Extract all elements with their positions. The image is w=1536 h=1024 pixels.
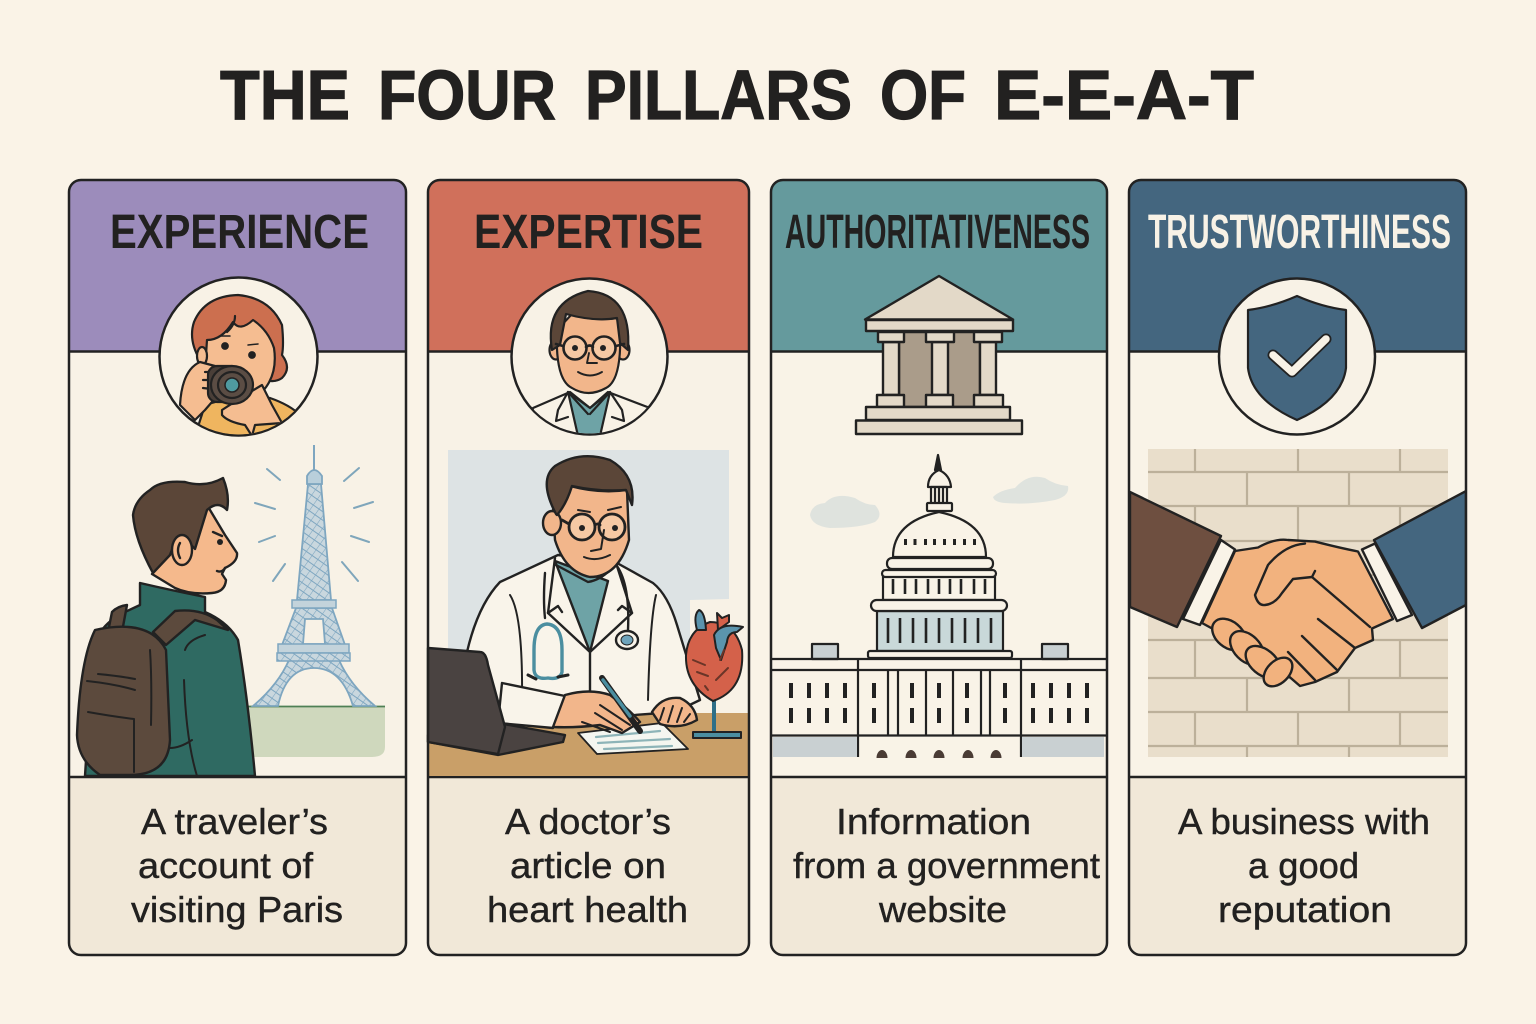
illustration: handshake (1130, 491, 1466, 692)
illustration: backdrop (448, 450, 729, 700)
title: THE (220, 56, 350, 134)
caption: expertise (487, 801, 688, 930)
illustration: traveler with backpack (77, 478, 255, 776)
caption: experience: visiting Paris (131, 889, 343, 930)
title: E-E-A-T (994, 56, 1254, 134)
title (220, 56, 1254, 134)
caption: experience: account of (138, 845, 314, 886)
illustration: capitol building (771, 455, 1107, 758)
writing hands (578, 723, 688, 754)
caption: experience (131, 801, 343, 930)
panel: expertise (428, 180, 749, 955)
icon: photographer (160, 278, 318, 440)
icon: doctor portrait (512, 278, 668, 440)
title: PILLARS (585, 56, 852, 134)
title: FOUR (378, 56, 556, 134)
caption: authoritativeness (793, 801, 1100, 930)
illustration: clouds (810, 477, 1068, 528)
title: OF (880, 56, 966, 134)
caption: trustworthiness: a good (1248, 845, 1359, 886)
illustration: doctor at desk (428, 456, 748, 776)
panel: trustworthiness (1129, 180, 1466, 955)
caption: experience: A traveler’s (141, 801, 328, 842)
caption: trustworthiness: A business with (1178, 801, 1430, 842)
caption: trustworthiness (1178, 801, 1430, 930)
caption: expertise: heart health (487, 889, 688, 930)
icon: classical building (856, 276, 1022, 434)
panel: experience (69, 180, 406, 955)
caption: authoritativeness: from a government (793, 845, 1100, 886)
desk (429, 713, 748, 776)
caption: authoritativeness: website (878, 889, 1007, 930)
illustration: heart model (686, 610, 743, 738)
illustration: brick wall (1148, 449, 1448, 757)
caption: authoritativeness: Information (836, 801, 1031, 842)
caption: trustworthiness: reputation (1218, 889, 1392, 930)
panel: authoritativeness (771, 180, 1107, 955)
laptop (428, 723, 565, 755)
heading: experience: EXPERIENCE (110, 206, 369, 259)
caption: expertise: A doctor’s (505, 801, 671, 842)
caption: expertise: article on (510, 845, 666, 886)
head (553, 486, 629, 577)
icon: shield with check (1219, 278, 1375, 434)
heading: authoritativeness: AUTHORITATIVENESS (785, 206, 1090, 259)
illustration: eiffel tower (248, 445, 385, 757)
heading: expertise: EXPERTISE (474, 206, 703, 259)
